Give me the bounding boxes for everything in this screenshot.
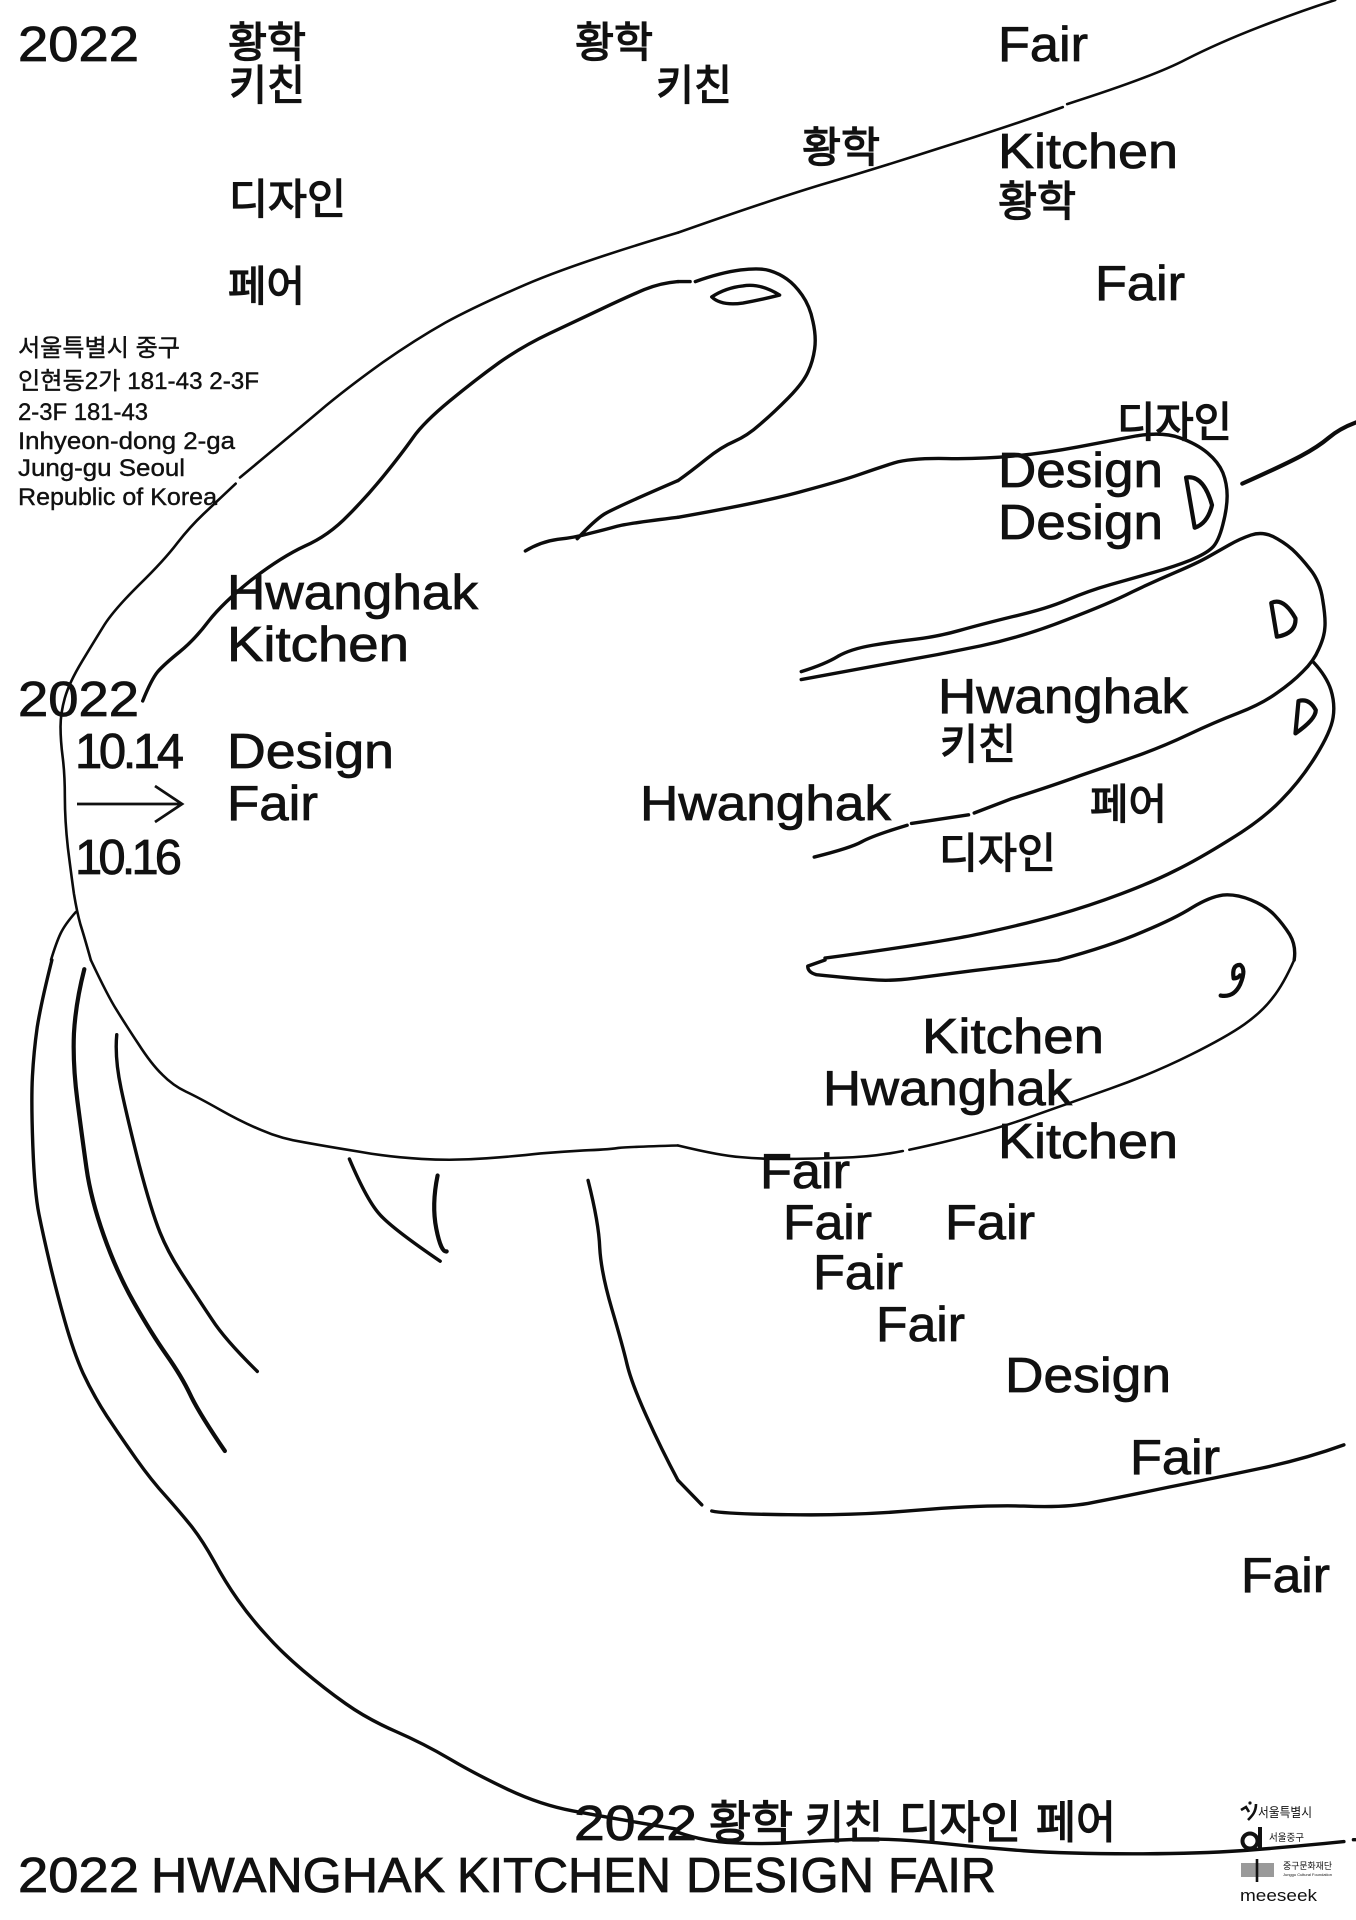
bottom Korean title: 키친 bbox=[805, 1797, 883, 1848]
hand illustration: top-right fingers bbox=[678, 0, 1356, 960]
logo: Junggu Cultural Foundation: Junggu Cultural Foundation bbox=[1283, 1873, 1332, 1877]
address text block: 2-3F 181-43 bbox=[18, 399, 148, 426]
scattered Korean word: 디자인 bbox=[1117, 399, 1232, 446]
scattered word Hwanghak: Hwanghak bbox=[938, 670, 1189, 724]
hand illustration: lower-left wrist and sleeves bbox=[32, 960, 678, 1829]
address text block: 서울특별시 중구 bbox=[18, 335, 180, 362]
address text block: Republic of Korea bbox=[18, 484, 218, 511]
Korean word: Design: 디자인 bbox=[229, 176, 346, 223]
scattered word Fair: Fair bbox=[945, 1196, 1035, 1250]
Korean word: Kitchen: 키친 bbox=[229, 62, 305, 109]
logo: Seoul Jung-gu bbox=[1242, 1827, 1304, 1850]
scattered word Fair: Fair bbox=[1095, 257, 1185, 311]
bottom English title: HWANGHAK bbox=[151, 1849, 445, 1903]
scattered Korean word: 디자인 bbox=[939, 830, 1056, 877]
address text block: Inhyeon-dong 2-ga bbox=[18, 428, 236, 455]
scattered word Fair: Fair bbox=[876, 1298, 965, 1352]
scattered word Design: Design bbox=[998, 496, 1163, 550]
logo: meeseek: meeseek bbox=[1240, 1886, 1318, 1905]
Korean word: Fair: 페어 bbox=[228, 263, 305, 310]
left block: Fair: Fair bbox=[227, 777, 318, 831]
scattered word Kitchen: Kitchen bbox=[998, 1115, 1178, 1169]
date: end: 10.16 bbox=[75, 831, 182, 885]
address text block: 인현동2가 181-43 2-3F bbox=[18, 368, 259, 395]
scattered word Hwanghak: Hwanghak bbox=[640, 777, 892, 831]
bottom Korean title: 황학 bbox=[709, 1797, 793, 1848]
scattered word Fair: Fair bbox=[1130, 1431, 1220, 1485]
date: start: 10.14 bbox=[75, 725, 184, 779]
bottom English title: KITCHEN bbox=[457, 1849, 671, 1903]
scattered word Hwanghak: Hwanghak bbox=[823, 1062, 1073, 1116]
bottom English title: 2022 bbox=[18, 1849, 139, 1903]
bottom Korean title: 페어 bbox=[1036, 1797, 1116, 1848]
logo: Seoul city: 서울특별시 bbox=[1258, 1805, 1312, 1820]
bottom Korean title bbox=[574, 1797, 1116, 1851]
title block top-left: year: 2022 bbox=[18, 18, 139, 72]
scattered Korean word: 키친 bbox=[940, 721, 1016, 768]
logo: Junggu Cultural Foundation bbox=[1241, 1859, 1332, 1882]
bottom English title: DESIGN bbox=[686, 1849, 874, 1903]
scattered Korean word: 황학 bbox=[575, 19, 653, 66]
bottom Korean title: 2022 bbox=[574, 1797, 697, 1851]
scattered Korean word: 페어 bbox=[1090, 781, 1167, 828]
scattered word Fair: Fair bbox=[760, 1145, 850, 1199]
scattered Korean word: 황학 bbox=[802, 124, 880, 171]
arrow: date range bbox=[77, 786, 182, 822]
bottom English title: FAIR bbox=[888, 1849, 996, 1903]
bottom English title bbox=[18, 1849, 996, 1903]
hand illustration: top-left lines bbox=[51, 233, 678, 960]
scattered Korean word: 황학 bbox=[998, 178, 1076, 225]
logo: Seoul Jung-gu: 서울중구 bbox=[1269, 1832, 1304, 1844]
left block: Kitchen: Kitchen bbox=[227, 618, 409, 672]
scattered word Design: Design bbox=[1005, 1349, 1171, 1403]
scattered word Fair: Fair bbox=[813, 1246, 903, 1300]
hand illustration: lower-right lines bbox=[678, 960, 1355, 1854]
Korean word: Hwanghak: 황학 bbox=[228, 19, 306, 66]
date: year: 2022 bbox=[18, 673, 139, 727]
scattered Korean word: 키친 bbox=[656, 62, 732, 109]
address text block: Jung-gu Seoul bbox=[18, 455, 185, 482]
scattered word Design: Design bbox=[998, 444, 1163, 498]
scattered word Kitchen: Kitchen bbox=[922, 1010, 1104, 1064]
bottom Korean title: 디자인 bbox=[899, 1797, 1021, 1848]
left block: Design: Design bbox=[227, 725, 394, 779]
logo: Seoul city bbox=[1241, 1801, 1312, 1820]
scattered word Fair: Fair bbox=[1241, 1549, 1330, 1603]
scattered word Fair: Fair bbox=[998, 18, 1088, 72]
left block: Hwanghak: Hwanghak bbox=[227, 566, 479, 620]
logo: Junggu Cultural Foundation: 중구문화재단 bbox=[1283, 1861, 1332, 1871]
scattered word Fair: Fair bbox=[783, 1196, 872, 1250]
scattered word Kitchen: Kitchen bbox=[998, 125, 1178, 179]
address text block bbox=[18, 335, 259, 511]
